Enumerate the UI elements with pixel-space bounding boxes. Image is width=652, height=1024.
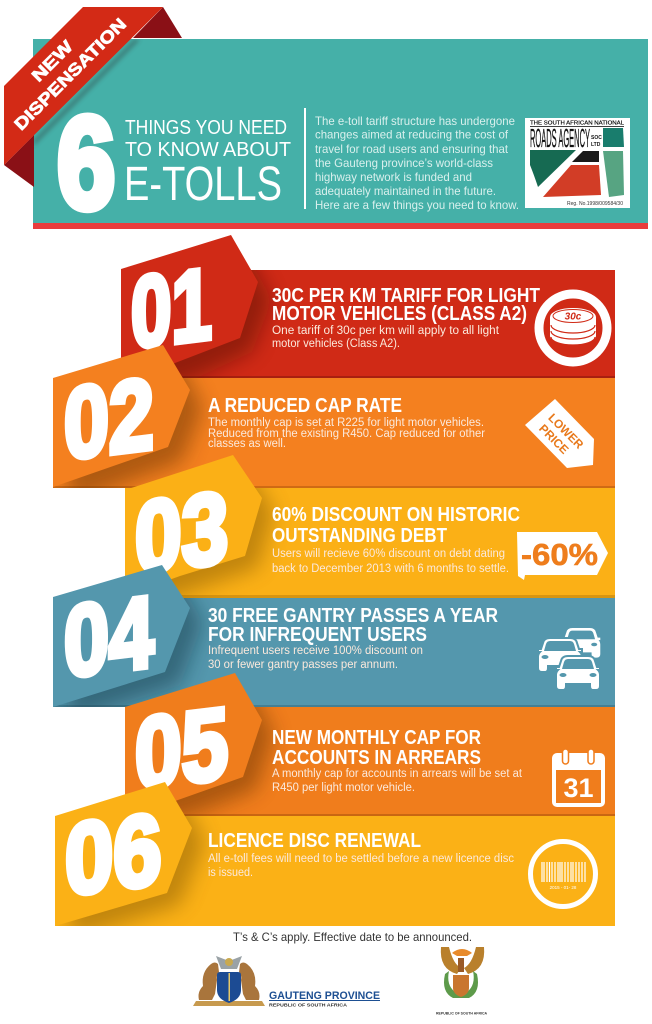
title: E-TOLLS [124,158,282,211]
text: item 02: Reduced from the existing R450. Cap reduced for other [208,428,485,440]
text: item 04: FOR INFREQUENT USERS [208,624,427,646]
tag: 02: 02 [64,358,154,481]
icon: coin stack [539,294,607,362]
text: item 06: All e-toll fees will need to be settled before a new licence disc [208,853,514,865]
text: item 02 [208,395,485,450]
text: item 01: MOTOR VEHICLES (CLASS A2) [272,303,527,325]
ribbon: new dispensation [4,7,182,187]
icon: barcode disc [530,842,596,906]
icon: cars [538,628,600,690]
icon: minus 60 percent tag [517,532,608,580]
logo: roads agency [525,118,630,208]
title: THINGS YOU NEED [125,117,287,139]
logo: south african coat of arms: REPUBLIC OF SOUTH AFRICA [436,1012,487,1016]
text: item 02: classes as well. [208,438,286,450]
text: item 04: 30 FREE GANTRY PASSES A YEAR [208,605,498,627]
text: item 04: 30 or fewer gantry passes per annum. [208,659,398,671]
text: item 02: A REDUCED CAP RATE [208,395,402,417]
logo: gauteng province: REPUBLIC OF SOUTH AFRICA [269,1002,348,1008]
intro paragraph: travel for road users and ensuring that [315,142,509,156]
title: TO KNOW ABOUT [125,139,291,161]
tag: 04 [53,565,190,707]
logo: roads agency: THE SOUTH AFRICAN NATIONAL [530,120,625,126]
tag: 01: 01 [131,246,212,370]
intro paragraph: the Gauteng province’s world-class [315,156,493,170]
icon: barcode disc: 2015 - 01- 28 [550,885,577,890]
intro paragraph [315,114,519,212]
tag: 06: 06 [65,792,162,917]
panel: item 04 [53,565,615,722]
intro paragraph: adequately maintained in the future. [315,184,496,198]
text: item 05: NEW MONTHLY CAP FOR [272,727,481,749]
panel: item 06 [55,782,615,940]
text: item 01 [272,285,540,350]
logo: roads agency: SOC [591,135,602,141]
text: item 03: 60% DISCOUNT ON HISTORIC [272,504,520,526]
intro paragraph: Here are a few things you need to know. [315,198,519,212]
icon: lower price tag [525,399,594,468]
logo: south african coat of arms [436,947,487,1016]
logo: roads agency: Reg. No.1998/009584/30 [567,201,623,207]
panel: item 02 [53,345,615,488]
text: item 05 [272,727,523,794]
text: item 04: Infrequent users receive 100% discount on [208,645,423,657]
ribbon: new dispensation: DISPENSATION [11,15,130,134]
logo: gauteng province: GAUTENG PROVINCE [269,990,380,1002]
panel: item 03 [125,455,615,610]
panel: item 01 [121,235,615,378]
tag: 02 [53,345,190,487]
icon: coin stack: 30c [565,312,582,322]
ribbon: new dispensation: NEW [28,36,78,86]
icon: minus 60 percent tag: -60% [521,537,598,572]
tag: 06 [55,782,192,926]
tag: 04: 04 [64,576,154,699]
text: item 03: Users will recieve 60% discount on debt dating [272,548,505,560]
text: item 06: LICENCE DISC RENEWAL [208,830,421,852]
text: item 06: is issued. [208,867,253,879]
text: item 04 [208,605,498,671]
text: item 05: ACCOUNTS IN ARREARS [272,747,481,769]
tag: 03: 03 [135,470,228,595]
text: item 01: 30C PER KM TARIFF FOR LIGHT [272,285,540,307]
text: item 03 [272,504,520,575]
text: item 01: motor vehicles (Class A2). [272,338,400,350]
crest: gauteng [193,956,265,1006]
text: item 05: R450 per light motor vehicle. [272,782,415,794]
tag: 05: 05 [135,686,228,811]
tag: 03 [125,455,262,596]
footer note: T’s & C’s apply. Effective date to be announced. [233,930,472,944]
icon: lower price tag: LOWER [545,411,587,452]
tag: 05 [125,673,262,820]
intro paragraph: changes aimed at reducing the cost of [315,128,509,142]
logo: roads agency: LTD [591,142,601,148]
logo: gauteng province [193,956,380,1008]
icon: calendar: 31 [563,773,594,803]
text: item 01: One tariff of 30c per km will apply to all light [272,325,500,337]
title [124,117,291,211]
text: item 03: OUTSTANDING DEBT [272,525,447,547]
icon: lower price tag: PRICE [536,421,572,457]
icon: calendar [552,749,605,807]
intro paragraph: The e-toll tariff structure has undergone [315,114,515,128]
intro paragraph: highway network is funded and [315,170,472,184]
text: item 06 [208,830,514,879]
panel: item 05 [125,673,615,830]
text: item 02: The monthly cap is set at R225 for light motor vehicles. [208,417,484,429]
tag: 01 [121,235,258,384]
big number 6: 6 [57,91,115,237]
panel: header [4,7,648,237]
text: item 03: back to December 2013 with 6 months to settle. [272,563,509,575]
text: item 05: A monthly cap for accounts in arrears will be set at [272,768,523,780]
